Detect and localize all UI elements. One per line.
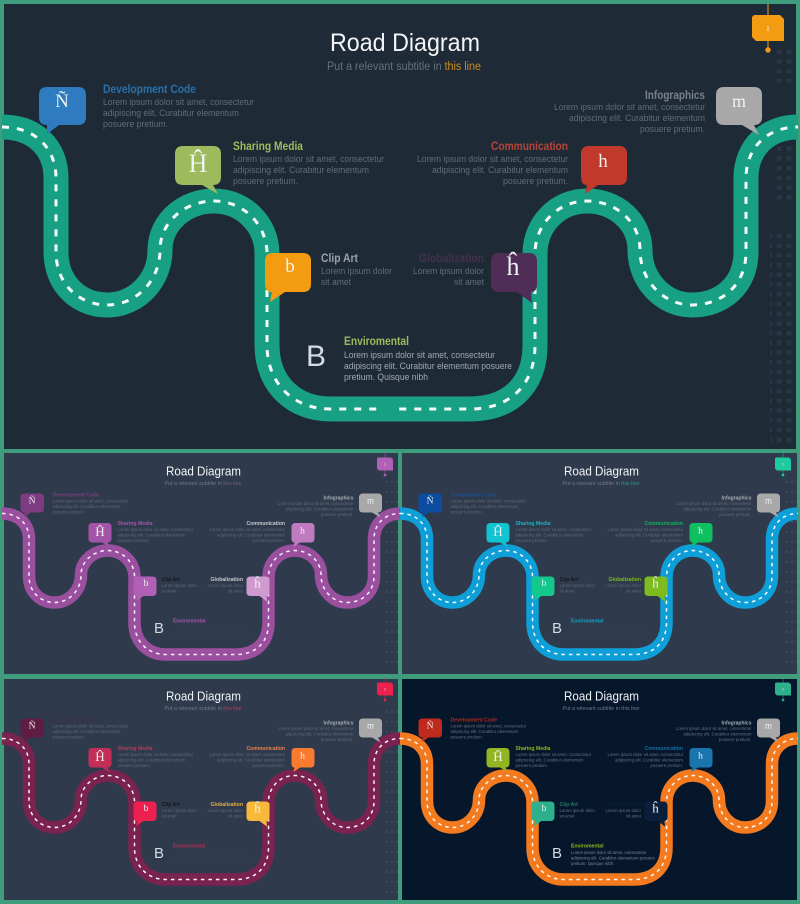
text: Communication: adipiscing elit. Curabitur elementum (217, 758, 285, 764)
callout: Infographics: m (732, 91, 746, 111)
callout: Infographics (757, 494, 780, 518)
text: Clip Art (560, 802, 595, 820)
text: Enviromental: adipiscing elit. Curabitur elementum posuere (571, 630, 655, 636)
text: Globalization (208, 577, 244, 594)
text: Sharing Media (118, 521, 193, 544)
text: Infographics: posuere pretium. (321, 737, 354, 743)
text: Sharing Media: Lorem ipsum dolor sit amet, consectetur (118, 752, 193, 758)
text: Sharing Media: Lorem ipsum dolor sit amet, consectetur (516, 527, 591, 533)
text: Communication: posuere pretium. (252, 763, 285, 769)
callout: Development Code (418, 718, 442, 742)
text: Communication: posuere pretium. (650, 763, 683, 769)
background dot strip (386, 480, 398, 670)
callout: Communication (690, 748, 712, 772)
text: Development Code: Development Code (450, 718, 497, 724)
callout: Clip Art (265, 253, 311, 302)
callout: Development Code (20, 494, 44, 517)
callout: Sharing Media: Ĥ (95, 749, 105, 764)
text: Enviromental: pretium. Quisque nibh (571, 636, 613, 642)
callout: Globalization (491, 252, 537, 303)
text: Globalization (606, 577, 642, 594)
text: Sharing Media: adipiscing elit. Curabitur elementum (118, 758, 186, 764)
callout: Globalization (246, 576, 270, 602)
text: Globalization: sit amet (228, 814, 244, 820)
callout: Globalization: ĥ (506, 252, 520, 281)
text: Communication: Communication (246, 746, 285, 752)
subtitle: Put a relevant subtitle in this line (562, 481, 639, 487)
text: Development Code: adipiscing elit. Curabitur elementum (450, 504, 519, 510)
text: Globalization: Lorem ipsum dolor (208, 583, 243, 589)
text: Sharing Media: posuere pretium. (516, 538, 548, 544)
callout: Development Code: Ñ (427, 720, 434, 732)
text: Clip Art (321, 253, 392, 288)
text: Development Code: Lorem ipsum dolor sit amet, consectetur (450, 498, 526, 504)
text: Clip Art: Clip Art (162, 802, 180, 808)
page tag: ı (766, 22, 770, 34)
page tag (775, 677, 791, 701)
callout: Communication (690, 523, 712, 547)
text: Globalization (208, 802, 244, 820)
text: Sharing Media: adipiscing elit. Curabitur elementum (233, 165, 369, 176)
road (400, 738, 798, 880)
text: Enviromental (344, 336, 512, 383)
callout: Globalization (644, 800, 668, 826)
callout: Sharing Media (486, 748, 510, 772)
callout: Infographics: m (765, 720, 772, 730)
text: Development Code (450, 492, 526, 516)
text: Clip Art: sit amet (560, 814, 575, 820)
text: Clip Art: sit amet (321, 277, 351, 288)
page tag (377, 452, 393, 476)
text: Infographics (676, 496, 752, 518)
text: Development Code: Lorem ipsum dolor sit amet, consectetur (52, 724, 128, 730)
text: Communication: adipiscing elit. Curabitur elementum (217, 532, 285, 538)
text: Communication: adipiscing elit. Curabitur elementum (615, 758, 683, 764)
callout: Globalization: ĥ (254, 800, 261, 816)
text: Sharing Media: Sharing Media (516, 521, 551, 527)
text: Enviromental (571, 618, 655, 642)
text: Enviromental: adipiscing elit. Curabitur elementum posuere (173, 856, 257, 862)
text: Sharing Media: adipiscing elit. Curabitur elementum (118, 532, 186, 538)
text: Development Code (52, 718, 128, 740)
text: Infographics: Lorem ipsum dolor sit amet, consectetur (676, 726, 752, 732)
text: Infographics: posuere pretium. (321, 512, 354, 518)
subtitle: Put a relevant subtitle in this line (164, 706, 241, 712)
text: Infographics: Lorem ipsum dolor sit amet, consectetur (676, 501, 752, 507)
callout: Sharing Media (88, 748, 112, 772)
text: Globalization: Globalization (608, 802, 641, 808)
text: Infographics (676, 720, 752, 743)
callout: Sharing Media: Ĥ (189, 149, 208, 178)
icon: letter B: B (552, 845, 562, 862)
text: Development Code (103, 84, 254, 130)
text: Communication: Communication (491, 141, 568, 153)
text: Globalization: Globalization (210, 577, 243, 583)
callout: Development Code (418, 494, 442, 517)
callout: Clip Art (134, 576, 156, 601)
text: Infographics: Lorem ipsum dolor sit amet, consectetur (554, 102, 705, 113)
text: Development Code: adipiscing elit. Curabitur elementum (52, 504, 121, 510)
callout: Development Code (20, 718, 44, 742)
text: Clip Art: Clip Art (321, 253, 358, 265)
callout: Development Code: Ñ (29, 720, 36, 732)
text: Sharing Media: posuere pretium. (118, 763, 150, 769)
callout: Clip Art: b (542, 804, 547, 814)
callout: Sharing Media: Ĥ (493, 749, 503, 764)
text: Globalization: Lorem ipsum dolor (606, 583, 641, 589)
text: Sharing Media: Lorem ipsum dolor sit amet, consectetur (118, 527, 193, 533)
text: Communication: Lorem ipsum dolor sit amet, consectetur (608, 527, 683, 533)
text: Communication (210, 521, 285, 544)
text: Communication: Communication (644, 521, 683, 527)
text: Clip Art (162, 577, 197, 594)
callout: Sharing Media (486, 523, 510, 547)
text: Communication: Lorem ipsum dolor sit amet, consectetur (417, 154, 568, 165)
icon: letter B: B (154, 845, 164, 862)
callout: Sharing Media: Ĥ (493, 524, 503, 539)
text: Infographics: Infographics (324, 720, 354, 726)
text: Communication (417, 141, 568, 187)
text: Enviromental: Lorem ipsum dolor sit amet, consectetur (173, 850, 249, 856)
callout: Sharing Media (175, 146, 221, 194)
callout: Communication (292, 748, 314, 772)
text: Clip Art (560, 577, 595, 594)
text: Development Code (52, 492, 128, 516)
text: Enviromental: Enviromental (173, 844, 206, 850)
text: Globalization: Lorem ipsum dolor (413, 266, 484, 277)
text: Communication: adipiscing elit. Curabitur elementum (615, 532, 683, 538)
text: Development Code: posuere pretium. (103, 119, 168, 130)
panel: blue variant (400, 452, 798, 674)
callout: Infographics: m (765, 496, 772, 506)
text: Communication: Lorem ipsum dolor sit amet, consectetur (210, 752, 285, 758)
background dot strip (770, 45, 796, 445)
text: Infographics: adipiscing elit. Curabitur elementum (569, 113, 705, 124)
text: Enviromental: pretium. Quisque nibh (173, 636, 215, 642)
text: Development Code: Lorem ipsum dolor sit amet, consectetur (103, 97, 254, 108)
subtitle: Put a relevant subtitle in this line (327, 61, 481, 73)
text: Globalization: sit amet (228, 588, 244, 594)
text: Development Code: adipiscing elit. Curabitur elementum (103, 108, 239, 119)
text: Sharing Media (516, 746, 591, 769)
road (400, 514, 798, 654)
callout: Sharing Media: Ĥ (95, 524, 105, 539)
callout: Sharing Media (88, 523, 112, 547)
panel: maroon variant (2, 677, 400, 900)
text: Development Code: adipiscing elit. Curabitur elementum (450, 729, 519, 735)
callout: Infographics (359, 494, 382, 518)
callout: Globalization: ĥ (652, 800, 659, 816)
text: Communication (210, 746, 285, 769)
panel: main teal road diagram (2, 4, 798, 449)
road (2, 514, 400, 654)
callout: Clip Art (532, 576, 554, 601)
text: Enviromental: Lorem ipsum dolor sit amet, consectetur (571, 850, 647, 856)
text: Clip Art: sit amet (560, 588, 575, 594)
text: Development Code: Lorem ipsum dolor sit amet, consectetur (450, 724, 526, 730)
page tag (377, 677, 393, 701)
callout: Communication: h (300, 752, 305, 762)
text: Enviromental: Enviromental (173, 618, 206, 624)
text: Globalization: sit amet (454, 277, 484, 288)
text: Development Code: posuere pretium. (450, 734, 483, 740)
page tag: ı (782, 462, 784, 468)
text: Sharing Media (233, 141, 384, 187)
text: Enviromental: pretium. Quisque nibh (571, 861, 613, 867)
panel: purple variant (2, 452, 400, 674)
text: Enviromental: adipiscing elit. Curabitur elementum posuere (173, 630, 257, 636)
title: Road Diagram (564, 464, 639, 478)
text: Enviromental: pretium. Quisque nibh (344, 372, 428, 383)
text: Clip Art: Clip Art (560, 802, 578, 808)
panel: orange variant (400, 677, 798, 900)
text: Clip Art: Lorem ipsum dolor (321, 266, 392, 277)
text: Globalization: Globalization (210, 802, 243, 808)
text: Globalization: Lorem ipsum dolor (208, 808, 243, 814)
text: Clip Art (162, 802, 197, 820)
text: Infographics: Infographics (722, 720, 752, 726)
text: Development Code: Development Code (103, 84, 196, 96)
icon: letter B: B (306, 340, 326, 373)
text: Infographics: adipiscing elit. Curabitur elementum (286, 506, 354, 512)
callout: Clip Art: b (542, 579, 547, 589)
text: Globalization (606, 802, 642, 820)
text: Sharing Media: Sharing Media (233, 141, 304, 153)
text: Sharing Media: adipiscing elit. Curabitur elementum (516, 532, 584, 538)
page tag: ı (782, 686, 784, 692)
callout: Globalization (246, 800, 270, 826)
text: Clip Art: Lorem ipsum dolor (560, 808, 595, 814)
text: Clip Art: Lorem ipsum dolor (162, 583, 197, 589)
road (2, 738, 400, 880)
text: Enviromental: pretium. Quisque nibh (173, 861, 215, 867)
text: Globalization: sit amet (626, 814, 642, 820)
subtitle: Put a relevant subtitle in this line (562, 706, 639, 712)
text: Enviromental: Enviromental (571, 618, 604, 624)
title: Road Diagram (166, 464, 241, 478)
callout: Clip Art (532, 802, 554, 826)
text: Development Code: posuere pretium. (450, 510, 483, 516)
text: Communication: Lorem ipsum dolor sit amet, consectetur (608, 752, 683, 758)
text: Communication: Communication (644, 746, 683, 752)
text: Clip Art: Lorem ipsum dolor (560, 583, 595, 589)
text: Sharing Media: Lorem ipsum dolor sit amet, consectetur (233, 154, 384, 165)
text: Development Code: adipiscing elit. Curabitur elementum (52, 729, 121, 735)
text: Infographics (278, 496, 354, 518)
text: Infographics: posuere pretium. (719, 737, 752, 743)
text: Globalization (413, 253, 484, 288)
text: Infographics: adipiscing elit. Curabitur elementum (684, 732, 752, 738)
callout: Globalization: ĥ (652, 576, 659, 590)
callout: Communication (292, 523, 314, 547)
text: Communication: posuere pretium. (252, 538, 285, 544)
text: Communication: Lorem ipsum dolor sit amet, consectetur (210, 527, 285, 533)
text: Enviromental (571, 844, 655, 867)
text: Development Code: Development Code (52, 492, 99, 498)
callout: Communication (581, 146, 627, 194)
callout: Communication: h (698, 752, 703, 762)
text: Sharing Media (516, 521, 591, 544)
text: Globalization: sit amet (626, 588, 642, 594)
text: Infographics: posuere pretium. (640, 124, 705, 135)
text: Development Code: posuere pretium. (52, 510, 85, 516)
text: Infographics: adipiscing elit. Curabitur elementum (286, 732, 354, 738)
text: Communication: posuere pretium. (650, 538, 683, 544)
text: Enviromental (173, 844, 257, 867)
title: Road Diagram (330, 29, 480, 57)
text: Infographics: adipiscing elit. Curabitur elementum (684, 506, 752, 512)
text: Infographics: posuere pretium. (719, 512, 752, 518)
text: Sharing Media: posuere pretium. (118, 538, 150, 544)
callout: Communication: h (698, 526, 703, 536)
callout: Globalization (644, 576, 668, 602)
text: Development Code: Lorem ipsum dolor sit amet, consectetur (52, 498, 128, 504)
page tag: ı (384, 462, 386, 468)
callout: Infographics: m (367, 496, 374, 506)
callout: Globalization: ĥ (254, 576, 261, 590)
text: Sharing Media: Sharing Media (516, 746, 551, 752)
text: Communication: Communication (246, 521, 285, 527)
background dot strip (386, 705, 398, 895)
text: Clip Art: Lorem ipsum dolor (162, 808, 197, 814)
text: Sharing Media: Lorem ipsum dolor sit amet, consectetur (516, 752, 591, 758)
text: Communication: adipiscing elit. Curabitur elementum (432, 165, 568, 176)
text: Globalization: Globalization (419, 253, 484, 265)
text: Development Code: Development Code (450, 492, 497, 498)
callout: Clip Art: b (144, 579, 149, 589)
callout: Clip Art (134, 802, 156, 826)
text: Development Code: Development Code (52, 718, 99, 724)
text: Enviromental: Lorem ipsum dolor sit amet, consectetur (173, 625, 249, 631)
title: Road Diagram (166, 690, 241, 704)
text: Infographics (278, 720, 354, 743)
text: Enviromental: Lorem ipsum dolor sit amet, consectetur (571, 625, 647, 631)
page tag: ı (384, 686, 386, 692)
text: Infographics: Infographics (324, 496, 354, 502)
callout: Infographics (757, 718, 780, 742)
icon: letter B: B (552, 620, 562, 637)
text: Enviromental (173, 618, 257, 642)
title: Road Diagram (564, 690, 639, 704)
text: Infographics: Infographics (645, 90, 705, 102)
text: Sharing Media: Sharing Media (118, 521, 153, 527)
callout: Development Code: Ñ (427, 494, 434, 506)
callout: Development Code (39, 87, 86, 134)
page tag (775, 452, 791, 476)
callout: Infographics (716, 87, 762, 135)
callout: Infographics: m (367, 720, 374, 730)
text: Communication (608, 746, 683, 769)
callout: Clip Art: b (144, 804, 149, 814)
text: Communication (608, 521, 683, 544)
callout: Infographics (359, 718, 382, 742)
text: Development Code: posuere pretium. (52, 734, 85, 740)
text: Enviromental: adipiscing elit. Curabitur elementum posuere (344, 361, 512, 372)
text: Sharing Media: Sharing Media (118, 746, 153, 752)
callout: Communication: h (300, 526, 305, 536)
text: Infographics: Infographics (722, 496, 752, 502)
text: Globalization: Globalization (608, 577, 641, 583)
text: Infographics (554, 90, 705, 135)
text: Infographics: Lorem ipsum dolor sit amet, consectetur (278, 501, 354, 507)
text: Clip Art: Clip Art (162, 577, 180, 583)
page tag (752, 4, 784, 53)
text: Enviromental: Enviromental (344, 336, 409, 348)
text: Enviromental: Lorem ipsum dolor sit amet, consectetur (344, 350, 495, 361)
text: Enviromental: adipiscing elit. Curabitur elementum posuere (571, 856, 655, 862)
text: Globalization: Lorem ipsum dolor (606, 808, 641, 814)
text: Clip Art: sit amet (162, 588, 177, 594)
text: Development Code (450, 718, 526, 740)
text: Clip Art: sit amet (162, 814, 177, 820)
text: Enviromental: Enviromental (571, 844, 604, 850)
text: Sharing Media: posuere pretium. (516, 763, 548, 769)
text: Clip Art: Clip Art (560, 577, 578, 583)
text: Sharing Media: adipiscing elit. Curabitur elementum (516, 758, 584, 764)
callout: Development Code: Ñ (29, 494, 36, 506)
text: Infographics: Lorem ipsum dolor sit amet, consectetur (278, 726, 354, 732)
road (2, 127, 798, 413)
text: Sharing Media (118, 746, 193, 769)
callout: Clip Art: b (285, 256, 295, 277)
background dot strip (785, 480, 797, 670)
text: Communication: posuere pretium. (503, 176, 568, 187)
callout: Communication: h (598, 151, 608, 172)
callout: Development Code: Ñ (55, 90, 69, 112)
subtitle: Put a relevant subtitle in this line (164, 481, 241, 487)
text: Sharing Media: posuere pretium. (233, 176, 298, 187)
icon: letter B: B (154, 620, 164, 637)
